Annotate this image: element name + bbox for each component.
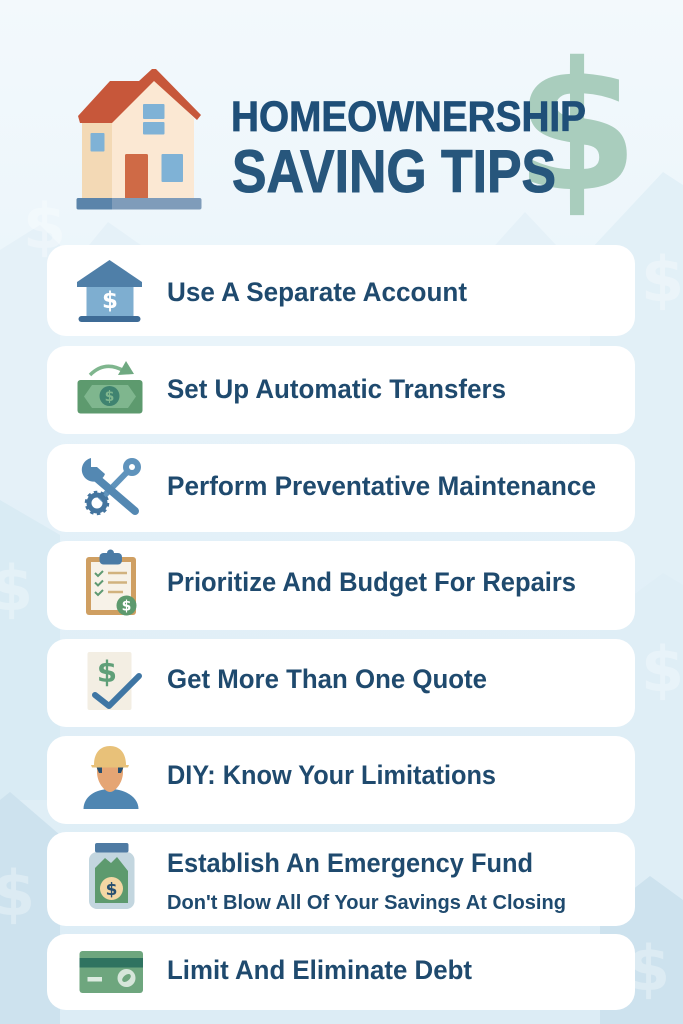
background: $ — [641, 243, 683, 316]
background: $ — [641, 633, 683, 706]
panel: automatic transfers: Set Up Automatic Transfers — [167, 374, 506, 404]
panel: quotes — [47, 639, 635, 727]
panel: use a separate account — [47, 245, 635, 336]
panel: limit debt: Limit And Eliminate Debt — [167, 955, 472, 985]
title — [231, 93, 586, 205]
panel: use a separate account: Use A Separate Account — [167, 277, 467, 307]
icon: house — [76, 69, 202, 210]
panel: limit debt — [47, 934, 635, 1010]
panel: quotes: Get More Than One Quote — [167, 664, 487, 694]
icon: clipboard — [86, 550, 136, 616]
panel: repairs budget — [47, 541, 635, 630]
panel: preventative maintenance: Perform Preventative Maintenance — [167, 471, 596, 501]
background: $ — [23, 190, 66, 263]
icon: clipboard: $ — [122, 598, 131, 614]
panel: diy — [47, 736, 635, 824]
icon: worker — [84, 746, 138, 809]
panel: preventative maintenance — [47, 444, 635, 532]
icon: cash with arrow — [78, 361, 142, 414]
panel: automatic transfers — [47, 346, 635, 434]
panel: emergency fund: Establish An Emergency Fund — [167, 848, 533, 878]
big dollar sign: $ — [515, 24, 639, 231]
icon: wrench and gear — [82, 458, 141, 514]
title: SAVING TIPS — [232, 138, 556, 205]
icon: money jar — [89, 843, 134, 909]
background: $ — [627, 932, 670, 1005]
title: HOMEOWNERSHIP — [231, 93, 586, 141]
icon: credit card — [80, 951, 143, 993]
icon: money jar: $ — [106, 880, 117, 900]
icon: cash with arrow: $ — [105, 389, 114, 405]
panel: diy: DIY: Know Your Limitations — [167, 760, 496, 790]
panel: repairs budget: Prioritize And Budget For Repairs — [167, 567, 576, 597]
panel: emergency fund: Don't Blow All Of Your Savings At Closing — [167, 892, 566, 914]
icon: quote with check: $ — [97, 655, 117, 689]
icon: bank: $ — [102, 288, 118, 314]
icon: quote with check — [88, 652, 139, 710]
icon: bank — [77, 260, 142, 322]
panel: emergency fund — [47, 832, 635, 926]
